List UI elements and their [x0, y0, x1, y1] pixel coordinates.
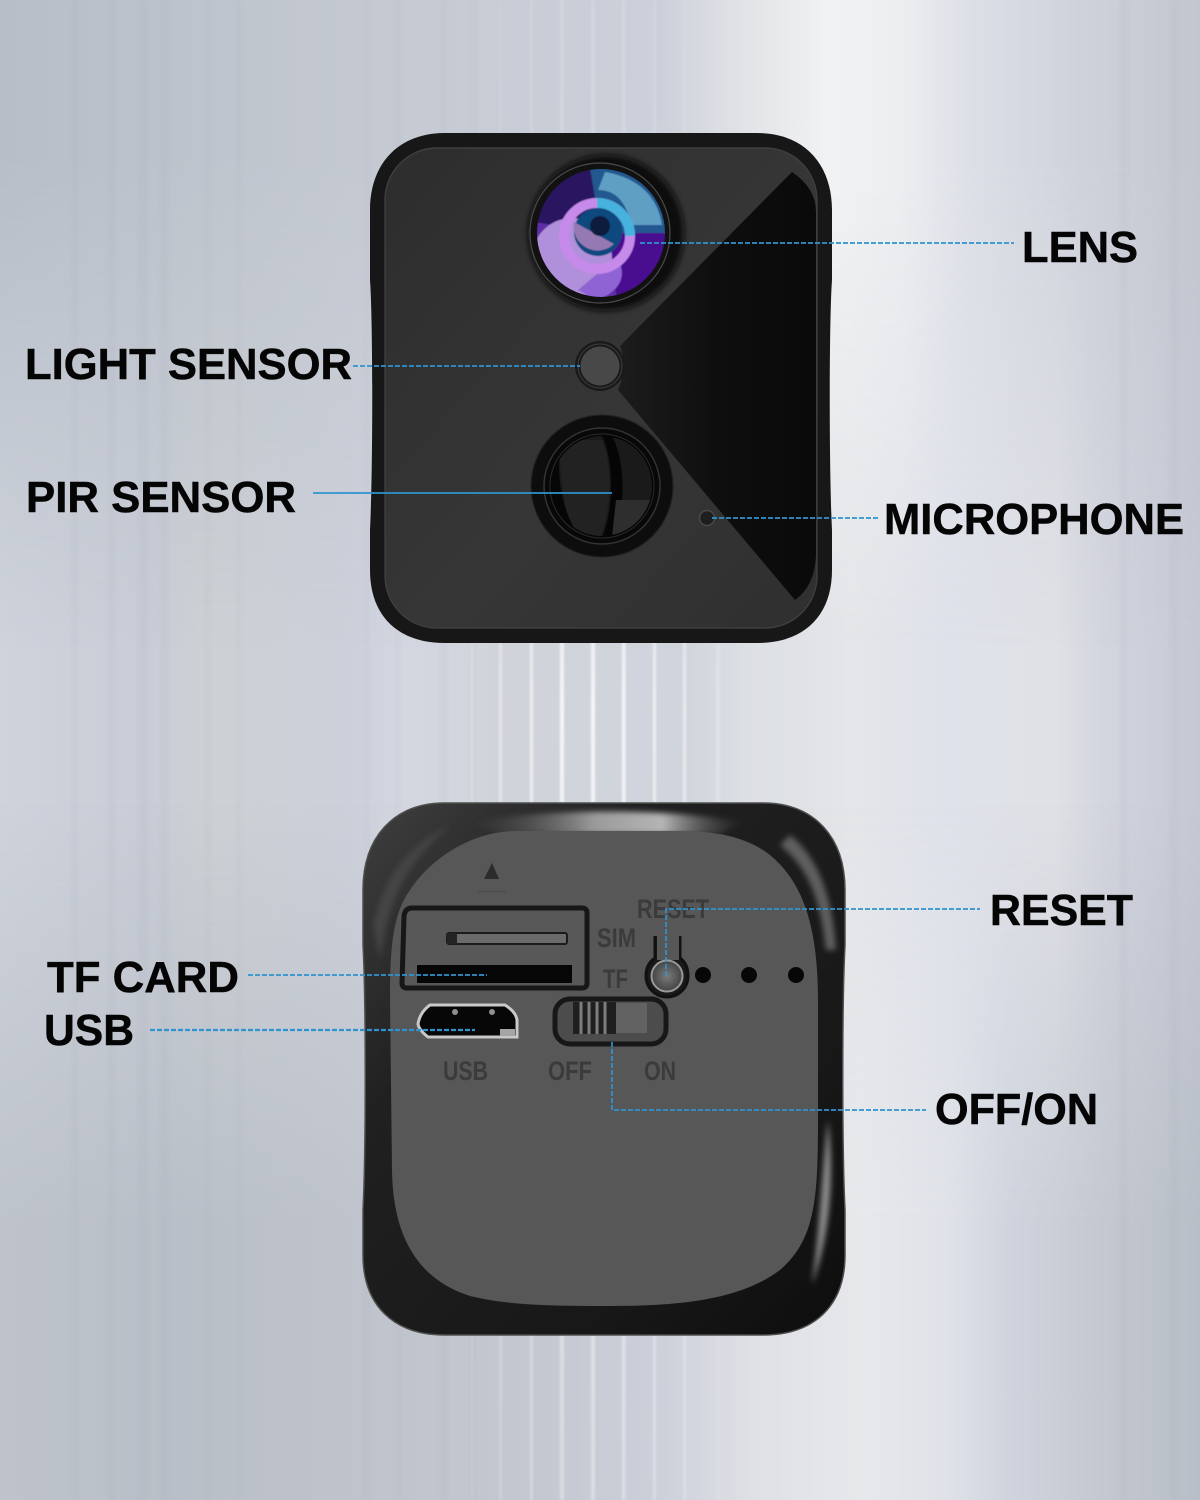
front body shell — [370, 133, 832, 643]
indicator dots — [695, 967, 804, 983]
printed label SIM: SIM — [597, 923, 636, 953]
shell highlights — [373, 812, 836, 1285]
light sensor — [575, 341, 625, 391]
card slot — [402, 908, 587, 988]
power switch — [555, 999, 666, 1044]
leader: light sensor — [353, 365, 580, 367]
label: off/on: OFF/ON — [935, 1085, 1098, 1134]
printed label ON: ON — [644, 1056, 676, 1086]
PIR sensor — [531, 415, 673, 557]
leader: lens — [640, 242, 1014, 244]
label: lens: LENS — [1022, 223, 1138, 272]
back body shell — [363, 803, 845, 1335]
USB port — [418, 1005, 517, 1037]
microphone hole — [700, 510, 714, 526]
printed label RESET: RESET — [637, 894, 709, 924]
leader: USB — [150, 1029, 475, 1031]
label: light sensor: LIGHT SENSOR — [25, 340, 352, 389]
label: microphone: MICROPHONE — [884, 495, 1184, 544]
printed label TF: TF — [603, 964, 628, 994]
camera front view — [370, 133, 832, 643]
dark reflection on glass — [618, 172, 816, 600]
lens — [528, 155, 684, 311]
printed label OFF: OFF — [548, 1056, 592, 1086]
printed label USB: USB — [443, 1056, 488, 1086]
label: TF card: TF CARD — [47, 953, 239, 1002]
label: reset: RESET — [990, 886, 1133, 935]
label: PIR sensor: PIR SENSOR — [26, 473, 296, 522]
arrow mark — [478, 863, 506, 892]
leader: TF card — [248, 974, 487, 976]
reset button — [646, 936, 688, 997]
camera back view — [363, 803, 845, 1335]
leader: reset — [666, 909, 980, 976]
front glass panel — [385, 148, 817, 628]
leader: PIR sensor — [313, 492, 612, 494]
back cover panel — [390, 831, 818, 1306]
leader: off/on — [612, 1042, 926, 1110]
label: USB: USB — [44, 1006, 134, 1055]
leader: microphone — [712, 517, 880, 519]
